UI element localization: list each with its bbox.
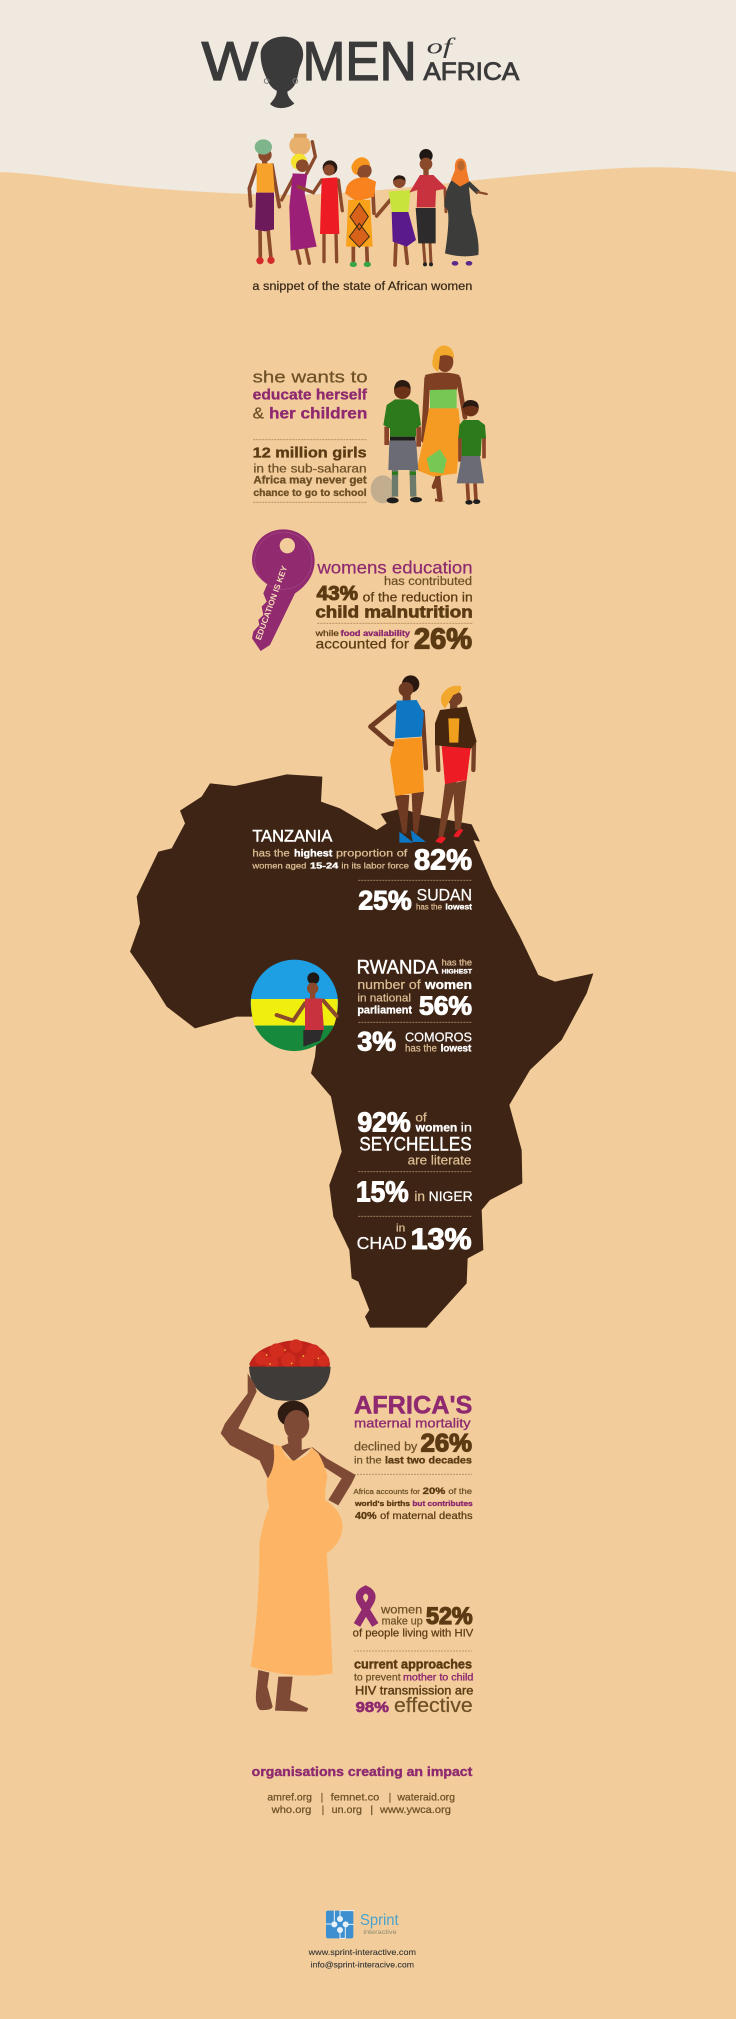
text block: maternal mortality (353, 1391, 473, 1522)
figure: woman carrying a jar (282, 134, 317, 263)
text block: Tanzania labor force: 82% (414, 844, 472, 876)
title: Women of Africa: of (427, 33, 456, 58)
text block: Rwanda parliament: COMOROS (405, 1030, 472, 1045)
text block: organisations creating an impact: femnet.co (331, 1792, 380, 1803)
text block: organisations creating an impact: who.org (271, 1805, 312, 1816)
text block: she wants to educate herself (253, 368, 368, 422)
text block: Rwanda parliament (357, 957, 472, 1056)
text block: contact details (308, 1947, 416, 1969)
text block: maternal mortality: maternal mortality (354, 1415, 471, 1430)
text block: organisations creating an impact: amref.org (267, 1792, 312, 1803)
text block: Tanzania labor force (251, 827, 472, 915)
figure: woman in red top and black skirt (409, 149, 447, 266)
text block: HIV statistics (353, 1602, 474, 1717)
figure: child in lime top (377, 175, 416, 265)
figure: girl in green shirt (457, 400, 486, 505)
text block: maternal mortality: Africa accounts for (353, 1487, 421, 1496)
title: Women of Africa: MEN (303, 31, 417, 92)
illustration: mother with two children (371, 345, 486, 505)
icon: purple key: EDUCATION IS KEY (253, 564, 289, 641)
text block: maternal mortality: of the (448, 1487, 473, 1496)
logo: Sprint Interactive (326, 1910, 399, 1938)
icon: Rwanda flag circle with woman (251, 960, 338, 1051)
text block: Rwanda parliament: 3% (357, 1026, 396, 1056)
figure: woman in orange hijab (444, 158, 487, 266)
text block: literacy statistics: 92% (357, 1107, 411, 1138)
illustration: group of seven African women (249, 134, 487, 267)
text block: Tanzania labor force: women aged (251, 860, 307, 870)
text block: Tanzania labor force: 25% (358, 885, 412, 915)
figure: woman with green headwrap (249, 139, 279, 264)
text block: Tanzania labor force: SUDAN (417, 886, 472, 905)
text block: literacy statistics: of (415, 1111, 427, 1125)
text block: Tanzania labor force: in its labor force (341, 860, 409, 870)
figure: boy in green shirt (383, 380, 422, 503)
text block: womens education statistic (314, 557, 473, 655)
text block: HIV statistics: women (380, 1602, 422, 1616)
text block: womens education statistic: 26% (414, 623, 472, 655)
text block: she wants to educate herself: educate herself (253, 387, 367, 403)
text block: maternal mortality: but contributes (412, 1499, 473, 1508)
subtitle: a snippet of the state of African women (252, 279, 472, 293)
text block: womens education statistic: 43% (317, 583, 358, 605)
title: Women of Africa: W (202, 31, 259, 92)
text block: HIV statistics: of people living with HIV (353, 1628, 474, 1640)
text block: literacy statistics: in (396, 1223, 405, 1235)
text block: 12 million girls statistic: chance to go to school (253, 488, 367, 499)
text block: HIV statistics: make up (382, 1616, 423, 1628)
text block: literacy statistics: in (461, 1121, 472, 1135)
icon: blue circuit square (326, 1910, 354, 1938)
text block: literacy statistics: 15% (356, 1176, 409, 1208)
text block: HIV statistics: effective (394, 1694, 473, 1717)
text block: Rwanda parliament: has the (442, 958, 472, 968)
text block: womens education statistic: of the reduction in (363, 591, 473, 605)
text block: Rwanda parliament: HIGHEST (442, 968, 472, 975)
text block: literacy statistics: SEYCHELLES (359, 1135, 472, 1156)
text block: maternal mortality: last two decades (385, 1455, 472, 1466)
text block: Rwanda parliament: RWANDA (357, 957, 438, 978)
text block: Tanzania labor force: TANZANIA (252, 827, 333, 846)
text block: she wants to educate herself: she wants to (253, 368, 368, 387)
text block: womens education statistic: while (314, 629, 340, 638)
text block: organisations creating an impact: un.org (332, 1805, 362, 1816)
text block: womens education statistic: accounted for (316, 636, 409, 651)
text block: HIV statistics: mother to child (403, 1673, 473, 1684)
text block: Tanzania labor force: has the (252, 849, 290, 860)
text block: contact details: www.sprint-interactive.com (308, 1947, 416, 1957)
text block: literacy statistics: 13% (411, 1223, 472, 1256)
text block: womens education statistic: womens education (316, 557, 473, 577)
title: Women of Africa (202, 31, 520, 108)
text block: organisations creating an impact: www.ywca.org (379, 1805, 451, 1816)
text block: maternal mortality: of maternal deaths (380, 1511, 473, 1522)
illustration: two women standing on the map (371, 675, 477, 843)
text block: HIV statistics: HIV transmission are (355, 1684, 473, 1698)
text block: organisations creating an impact: | (370, 1805, 373, 1816)
icon: bowl of tomatoes (249, 1339, 331, 1401)
text block: maternal mortality: in the (354, 1455, 382, 1466)
text block: HIV statistics: to prevent (354, 1673, 401, 1684)
icon: woman's head silhouette (261, 37, 303, 108)
text block: she wants to educate herself: & (253, 405, 264, 422)
text block: literacy statistics (356, 1107, 473, 1256)
arms and head (221, 1373, 273, 1463)
figure: woman in red dress (298, 160, 342, 262)
text block: Rwanda parliament: has the (405, 1044, 437, 1055)
text block: Rwanda parliament: number of (357, 977, 421, 992)
text block: 12 million girls statistic: in the sub-saharan (253, 462, 367, 476)
text block: Tanzania labor force: lowest (445, 901, 472, 911)
text block: womens education statistic: food availability (341, 629, 411, 638)
panel: education of herself and her children (253, 345, 486, 505)
text block: organisations creating an impact: organisations creating an impact (252, 1764, 473, 1779)
text block: Tanzania labor force: 15-24 (310, 860, 339, 870)
text block: Rwanda parliament: lowest (441, 1044, 472, 1055)
text block: maternal mortality: world's births (354, 1499, 410, 1508)
text block: she wants to educate herself: her children (269, 405, 367, 422)
text block: Rwanda parliament: 56% (419, 990, 472, 1020)
figure: woman with patterned skirt (345, 157, 376, 267)
text block: contact details: info@sprint-interacive.com (311, 1959, 414, 1969)
text block: 12 million girls statistic: Africa may never get (253, 475, 367, 487)
text block: 12 million girls statistic (253, 446, 367, 499)
text block: maternal mortality: 20% (423, 1486, 445, 1496)
text block: 12 million girls statistic: 12 million girls (253, 446, 367, 462)
text block: organisations creating an impact: wateraid.org (396, 1792, 455, 1803)
logo: Sprint Interactive: Sprint (360, 1912, 399, 1929)
text block: maternal mortality: 40% (355, 1511, 377, 1522)
text block: literacy statistics: NIGER (429, 1188, 473, 1204)
text block: HIV statistics: 98% (356, 1699, 389, 1716)
text block: womens education statistic: child malnutrition (315, 602, 473, 621)
panel: education is key (252, 529, 473, 655)
text block: HIV statistics: current approaches (354, 1657, 472, 1671)
text block: literacy statistics: are literate (408, 1153, 471, 1167)
text block: Tanzania labor force: highest (294, 849, 333, 860)
figure: woman in jacket and red skirt (435, 686, 477, 843)
text block: maternal mortality: declined by (354, 1440, 417, 1454)
text block: Tanzania labor force: proportion of (336, 849, 408, 860)
icon: purple key (252, 529, 315, 651)
map of Africa (130, 774, 593, 1328)
text block: maternal mortality: 26% (421, 1430, 472, 1458)
text block: literacy statistics: women (415, 1121, 457, 1135)
text block: womens education statistic: has contributed (384, 574, 472, 588)
text block: Tanzania labor force: has the (416, 901, 442, 911)
text block: literacy statistics: in (414, 1188, 425, 1204)
text block: maternal mortality: AFRICA'S (354, 1391, 472, 1419)
icon: backpack (371, 475, 395, 503)
text block: organisations creating an impact: | (321, 1792, 323, 1803)
text block: organisations creating an impact: | (322, 1805, 324, 1816)
text block: HIV statistics: 52% (426, 1603, 473, 1630)
text block: literacy statistics: CHAD (357, 1233, 407, 1253)
logo: Sprint Interactive: interactive (363, 1929, 397, 1936)
icon: awareness ribbon (357, 1589, 375, 1625)
text block: organisations creating an impact (252, 1764, 473, 1816)
text block: Rwanda parliament: women (424, 977, 472, 992)
text block: Rwanda parliament: in national (357, 993, 411, 1005)
figure: woman in blue top and orange skirt (371, 675, 426, 843)
text block: Rwanda parliament: parliament (357, 1004, 412, 1016)
title: Women of Africa: AFRICA (423, 59, 520, 86)
illustration: pregnant woman carrying a bowl (221, 1339, 356, 1712)
text block: organisations creating an impact: | (389, 1792, 391, 1803)
